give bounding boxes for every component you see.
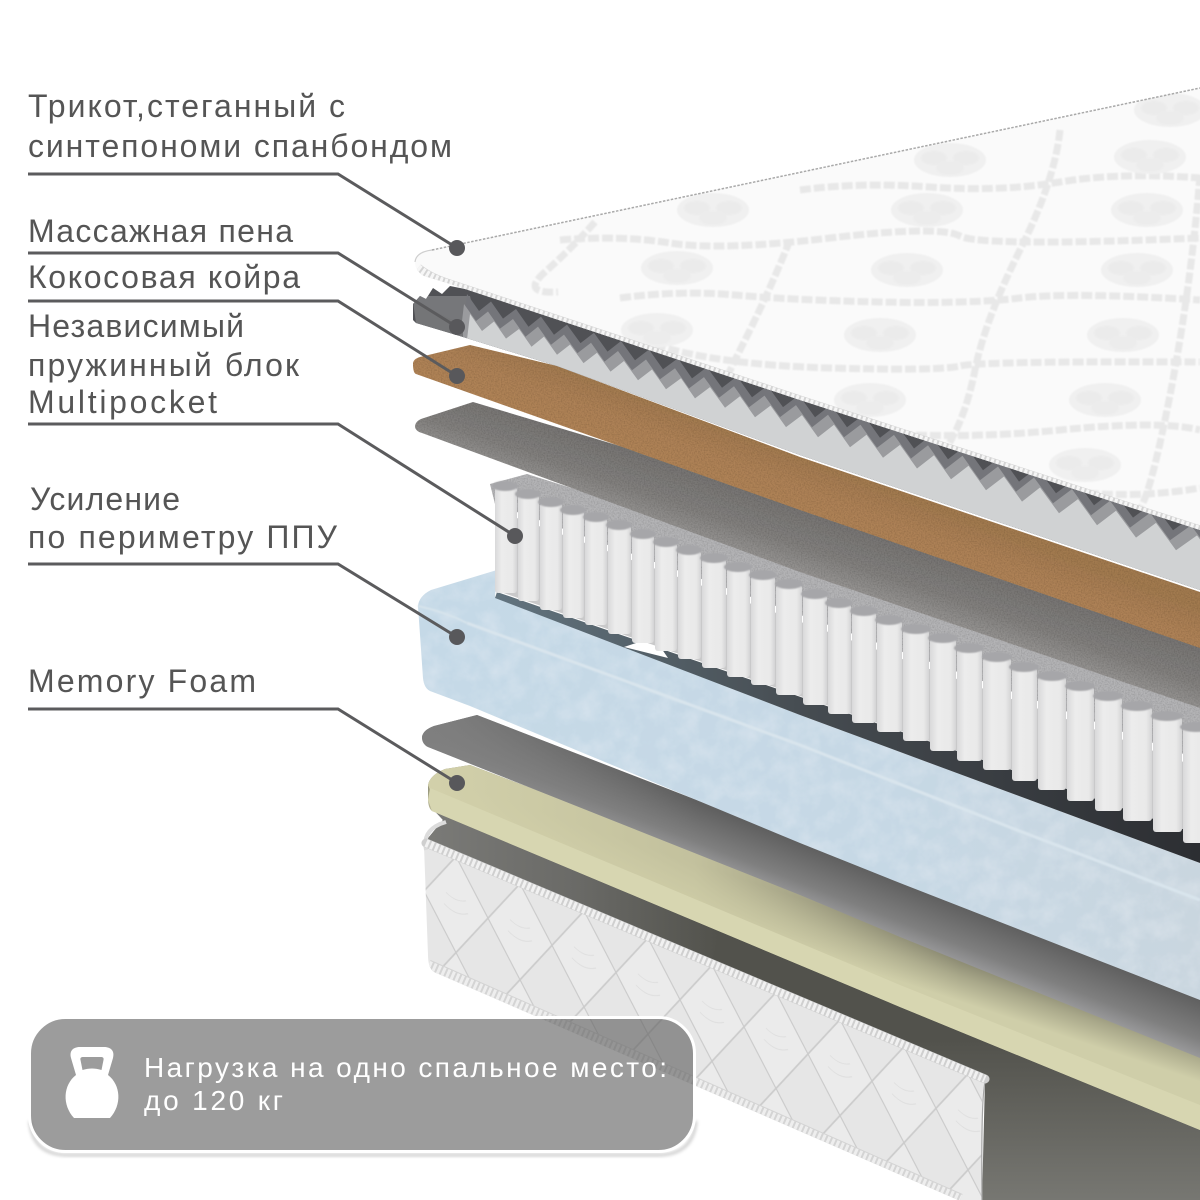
label: perimeter reinforcement: Усиление [30, 481, 180, 517]
callout text [144, 1052, 667, 1116]
layer: grey felt under coir [415, 402, 1200, 708]
leader: perimeter foam [28, 564, 457, 637]
leader: massage foam [28, 253, 457, 327]
leader: memory foam [28, 709, 457, 783]
callout shadow [30, 1121, 696, 1155]
layer: coconut coir [413, 345, 1200, 648]
label: pocket spring block: Независимый [28, 308, 244, 344]
callout: load per sleeping place [30, 1018, 696, 1155]
icon: kettlebell [66, 1047, 118, 1118]
layer: quilted top cover [415, 88, 1200, 530]
label: coconut coir: Кокосовая койра [28, 259, 300, 295]
spring pockets [495, 487, 1200, 843]
layer: massage foam with egg-crate profile [413, 286, 1200, 590]
label: pocket spring block [28, 308, 300, 420]
leader: spring block [28, 424, 515, 536]
label: pocket spring block: пружинный блок [28, 347, 300, 383]
label: top cover [28, 88, 452, 164]
white gap under the springs [624, 640, 668, 658]
leader: top cover [28, 174, 457, 248]
label: memory foam: Memory Foam [28, 663, 256, 699]
label: massage foam: Массажная пена [28, 213, 293, 249]
layer: blue foam perimeter reinforcement [418, 570, 1200, 1000]
label: top cover: синтепономи спанбондом [28, 128, 452, 164]
callout panel [30, 1018, 694, 1152]
top cover damask pattern [418, 93, 1200, 530]
layer: memory foam (cream) [428, 765, 1200, 1130]
label: perimeter reinforcement [28, 481, 338, 555]
label: perimeter reinforcement: по периметру ППУ [28, 519, 338, 555]
callout text: до 120 кг [144, 1085, 283, 1116]
callout text: Нагрузка на одно спальное место: [144, 1052, 667, 1083]
dark base under the spring block [495, 592, 1200, 863]
layer: quilted bottom cover side [424, 822, 985, 1200]
layer: bottom cover interior [424, 806, 1200, 1200]
mattress exploded layers [405, 88, 1200, 1200]
label: pocket spring block: Multipocket [28, 384, 217, 420]
layer labels [28, 88, 452, 699]
marker dots [449, 240, 523, 791]
layer: pocket spring block [490, 474, 1200, 843]
callout leader lines [28, 174, 515, 783]
leader: coir [28, 301, 457, 376]
label: top cover: Трикот,стеганный с [28, 88, 345, 124]
spring caps [492, 481, 1200, 732]
layer: grey felt sheet [422, 715, 1200, 1058]
